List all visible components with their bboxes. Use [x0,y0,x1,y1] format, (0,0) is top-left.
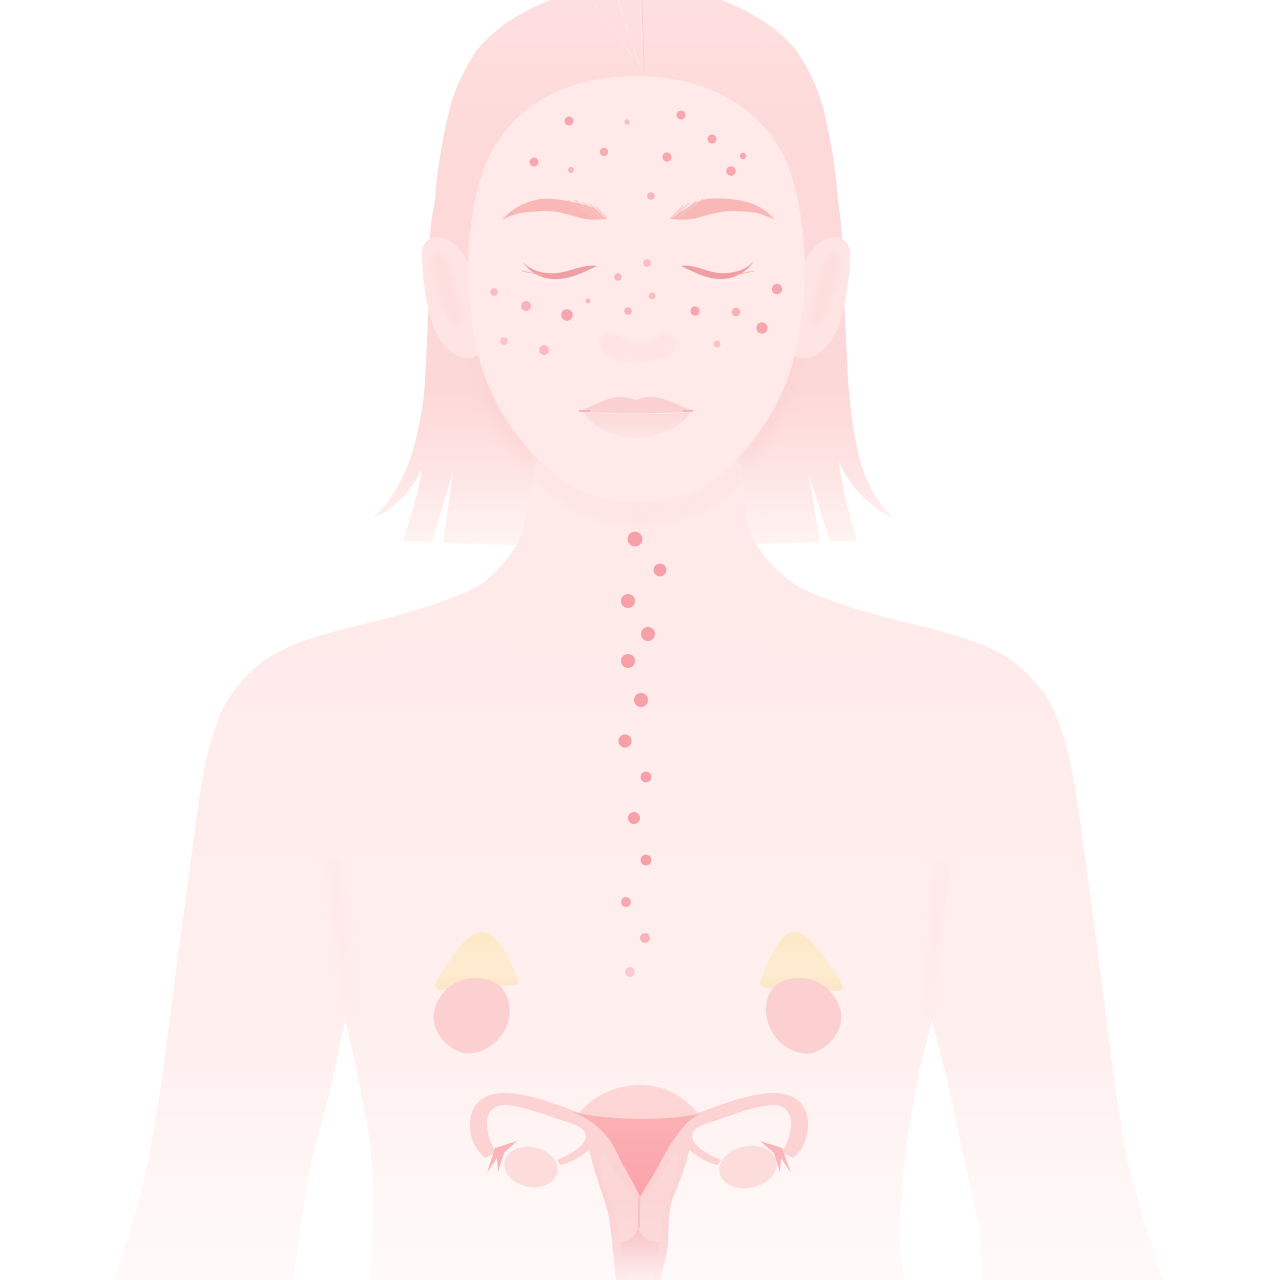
uterine body [580,1085,697,1280]
right ear [790,237,850,358]
body [113,453,1163,1280]
arm shadows [328,860,352,1020]
right fallopian tube and ligament [678,1093,808,1165]
right ovary [715,1140,781,1194]
right eyebrow [670,198,775,220]
right kidney and adrenal [760,932,843,1053]
right closed eye [681,261,754,281]
left eyebrow [502,199,607,220]
right fimbriae [760,1141,791,1173]
left kidney and adrenal [434,932,518,1053]
spots [490,110,782,355]
left ovary [500,1142,562,1192]
cervical canal [638,1197,640,1228]
chest spots line [618,532,666,977]
chin shadow [527,453,747,512]
hair [373,0,893,545]
uterus and reproductive organs [470,1085,808,1280]
left ear [422,237,482,358]
cervix lobes [600,1150,678,1242]
face [468,76,805,502]
left closed eye [522,262,597,281]
uterine cavity [573,1112,702,1197]
vaginal canal [620,1228,660,1280]
nose [600,333,676,363]
lips [579,397,693,438]
left fallopian tube and ligament [470,1093,600,1165]
left fimbriae [487,1141,517,1173]
